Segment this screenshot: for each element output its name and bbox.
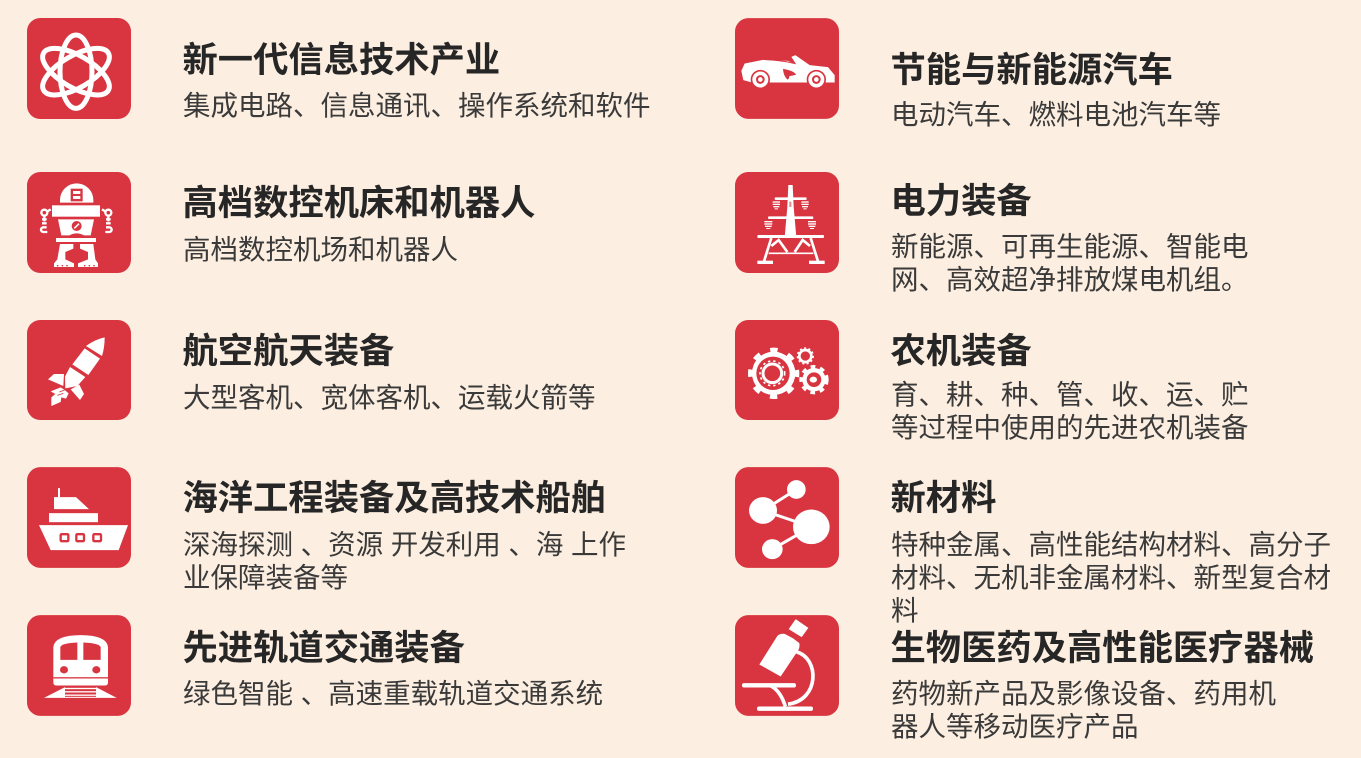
text block: 育、耕、种、管、收、运、贮 (891, 379, 1248, 410)
text block (891, 529, 1331, 626)
panel: 电力装备 (735, 172, 1248, 295)
text block: 业保障装备等 (183, 562, 348, 593)
heading: 电力装备 (890, 182, 1032, 221)
heading: 节能与新能源汽车 (890, 51, 1173, 90)
panel: 航空航天装备 (27, 320, 596, 420)
text block (183, 529, 626, 593)
text block: 新能源、可再生能源、智能电 (891, 231, 1248, 262)
text block: 材料、无机非金属材料、新型复合材 (891, 562, 1331, 593)
text block: 等过程中使用的先进农机装备 (891, 412, 1248, 443)
text block: 电动汽车、燃料电池汽车等 (891, 99, 1221, 130)
icon: rocket (27, 320, 131, 420)
text block: 器人等移动医疗产品 (891, 710, 1138, 742)
icon: atom (27, 18, 131, 119)
text block (891, 678, 1276, 742)
icon: molecule network (735, 467, 839, 568)
panel: 先进轨道交通装备 (27, 615, 603, 716)
text block: 集成电路、信息通讯、操作系统和软件 (183, 90, 650, 121)
text block: 网、高效超净排放煤电机组。 (891, 264, 1248, 295)
panel: 新一代信息技术产业 (27, 18, 650, 121)
heading: 新一代信息技术产业 (182, 41, 500, 80)
panel: 新材料 (735, 467, 1331, 626)
text block: 料 (891, 595, 918, 626)
heading: 农机装备 (890, 332, 1032, 371)
icon: train (27, 615, 131, 716)
icon: car (735, 18, 839, 119)
heading: 新材料 (890, 479, 996, 518)
heading: 航空航天装备 (182, 332, 394, 371)
text block: 绿色智能 、高速重载轨道交通系统 (183, 678, 603, 709)
panel: 生物医药及高性能医疗器械 (735, 615, 1314, 742)
heading: 生物医药及高性能医疗器械 (890, 629, 1314, 668)
text block: 特种金属、高性能结构材料、高分子 (891, 529, 1331, 560)
text block (891, 231, 1248, 295)
heading: 高档数控机床和机器人 (182, 184, 535, 223)
text block: 高档数控机场和机器人 (183, 234, 458, 265)
text block: 药物新产品及影像设备、药用机 (891, 678, 1276, 708)
heading: 海洋工程装备及高技术船舶 (182, 479, 606, 518)
icon: ship (27, 467, 131, 568)
icon: microscope (735, 615, 839, 716)
icon: power tower (735, 172, 839, 273)
panel: 海洋工程装备及高技术船舶 (27, 467, 626, 593)
panel: 农机装备 (735, 320, 1248, 443)
text block: 大型客机、宽体客机、运载火箭等 (183, 382, 596, 413)
text block (891, 379, 1248, 443)
panel: 高档数控机床和机器人 (27, 172, 535, 273)
icon: robot (27, 172, 131, 273)
icon: gears (735, 320, 839, 420)
panel: 节能与新能源汽车 (735, 18, 1221, 130)
heading: 先进轨道交通装备 (182, 629, 465, 668)
text block: 深海探测 、资源 开发利用 、海 上作 (183, 529, 626, 560)
